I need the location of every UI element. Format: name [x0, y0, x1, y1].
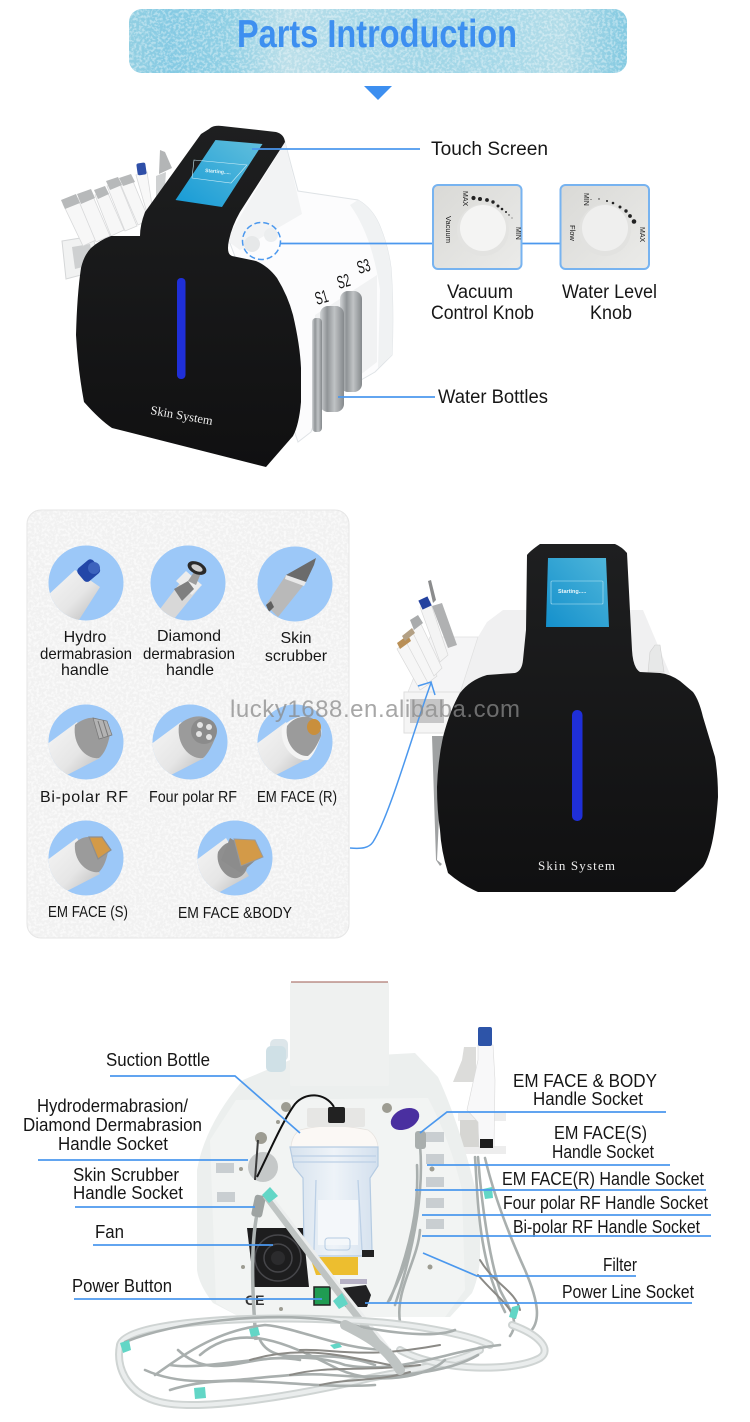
power socket	[342, 1285, 371, 1307]
panel: water level knob: MAX	[638, 227, 645, 242]
panel: handles	[27, 510, 349, 938]
CE mark: CE	[245, 1292, 264, 1308]
handle: four polar RF	[150, 704, 228, 782]
callout: filter	[423, 1253, 637, 1276]
screen: Starting.....	[558, 589, 587, 595]
label: skin scrubber: Skin	[280, 630, 312, 647]
callout: bi-polar socket: Bi-polar RF Handle Socket	[513, 1217, 700, 1237]
callout: dermabrasion handle socket: Handle Socket	[58, 1134, 168, 1154]
callout: EM face S socket: Handle Socket	[552, 1142, 654, 1162]
panel: water level knob: Flow	[568, 225, 577, 241]
black front panel	[76, 126, 301, 467]
handle: diamond dermabrasion	[150, 546, 226, 620]
panel: vacuum knob: Vacuum	[444, 216, 453, 243]
callout: suction bottle	[106, 1050, 300, 1133]
callout: touch screen: Touch Screen	[431, 139, 548, 160]
arrow: down triangle	[364, 86, 392, 100]
handle: hydro dermabrasion	[46, 546, 124, 623]
bolts	[239, 1102, 434, 1311]
bottle labels: S1	[313, 286, 331, 309]
label: diamond dermabrasion: handle	[166, 662, 214, 679]
callout: EM face R socket: EM FACE(R) Handle Socket	[502, 1169, 704, 1189]
brand: Skin System	[538, 858, 615, 873]
suction bottle	[257, 1095, 378, 1257]
callout: EM face S socket	[427, 1123, 670, 1165]
callout: dermabrasion handle socket: Diamond Dermabrasion	[23, 1115, 202, 1135]
title: Parts Introduction	[237, 13, 517, 56]
label: vacuum control knob: Control Knob	[431, 303, 534, 324]
hose coil	[119, 1317, 545, 1405]
callout: skin scrubber socket: Skin Scrubber	[73, 1165, 179, 1185]
white rear body	[460, 610, 670, 693]
label: diamond dermabrasion: dermabrasion	[143, 646, 235, 663]
knobs	[244, 228, 278, 252]
warning label	[310, 1257, 358, 1275]
label: EM face and body: EM FACE &BODY	[178, 905, 292, 922]
handles on rack	[397, 580, 457, 690]
label: skin scrubber	[265, 630, 328, 665]
label: diamond dermabrasion	[143, 628, 235, 679]
panel: water level knob: MIN	[582, 193, 589, 206]
bottle labels: S3	[355, 255, 373, 278]
panel: vacuum knob: MAX	[461, 191, 468, 206]
power switch	[314, 1287, 330, 1305]
label: vacuum control knob: Vacuum	[447, 282, 513, 303]
label: hydro dermabrasion: Hydro	[64, 629, 106, 646]
handle: bi-polar RF	[46, 704, 124, 782]
callout: suction bottle: Suction Bottle	[106, 1050, 210, 1070]
callout: four polar socket: Four polar RF Handle Socket	[503, 1193, 708, 1213]
machine: front three-quarter view	[61, 126, 393, 467]
label: water level knob: Water Level	[562, 282, 657, 303]
right knobs	[648, 645, 664, 672]
water bottles	[312, 275, 377, 432]
callout: fan: Fan	[95, 1222, 124, 1242]
tower	[290, 982, 389, 1086]
bottle labels: S2	[335, 270, 353, 293]
arrow: handles to rack	[350, 682, 435, 848]
label: water level knob	[562, 282, 657, 324]
callout: skin scrubber socket	[73, 1165, 255, 1207]
rear handles	[453, 1027, 506, 1154]
handle: EM face S	[46, 820, 124, 898]
touch screen	[176, 140, 262, 207]
callout: EM face and body socket: Handle Socket	[533, 1089, 643, 1109]
right cables	[388, 1131, 537, 1336]
label: diamond dermabrasion: Diamond	[157, 628, 221, 645]
callout: power button: Power Button	[72, 1276, 172, 1296]
callout: skin scrubber socket: Handle Socket	[73, 1183, 183, 1203]
label: hydro dermabrasion: handle	[61, 662, 109, 679]
label: EM face S: EM FACE (S)	[48, 904, 128, 921]
label: water level knob: Knob	[590, 303, 632, 324]
label: bi-polar RF: Bi-polar RF	[40, 789, 128, 806]
callout: dermabrasion handle socket	[23, 1096, 248, 1160]
callout: EM face and body socket: EM FACE & BODY	[513, 1071, 657, 1091]
label: skin scrubber: scrubber	[265, 648, 328, 665]
white body	[197, 1053, 480, 1317]
handle: EM face R	[255, 704, 332, 782]
blue light bar	[572, 710, 582, 821]
label: vacuum control knob	[431, 282, 534, 324]
panel: vacuum knob: MIN	[514, 227, 521, 240]
bottle labels	[313, 255, 373, 309]
white body	[225, 142, 393, 442]
small plates	[216, 1132, 444, 1229]
callout: power line socket: Power Line Socket	[562, 1282, 694, 1302]
screen	[546, 558, 609, 627]
callout: EM face S socket: EM FACE(S)	[554, 1123, 647, 1143]
label: four polar RF: Four polar RF	[149, 789, 237, 806]
callout: filter: Filter	[603, 1255, 637, 1275]
socket plate	[248, 1152, 278, 1182]
watermark: lucky1688.en.alibaba.com	[230, 696, 520, 723]
callout: water bottles: Water Bottles	[438, 387, 548, 408]
callout: dermabrasion handle socket: Hydrodermabrasion/	[37, 1096, 188, 1116]
label: hydro dermabrasion	[40, 629, 132, 679]
machine: front view	[397, 544, 718, 892]
brand: Skin System	[149, 403, 214, 428]
panel: water level knob	[560, 185, 649, 269]
machine: rear view	[119, 982, 545, 1405]
black panel	[437, 544, 718, 892]
callout: EM face and body socket	[420, 1071, 666, 1133]
handle: EM face and body	[195, 820, 272, 898]
handles in tray	[61, 150, 172, 279]
fan	[247, 1228, 309, 1287]
title banner	[129, 9, 627, 73]
label: hydro dermabrasion: dermabrasion	[40, 646, 132, 663]
sticker	[387, 1104, 423, 1134]
wires	[251, 1140, 390, 1350]
label: EM face R: EM FACE (R)	[257, 789, 337, 806]
callout: knobs line	[242, 222, 560, 260]
top knobs	[266, 1039, 288, 1072]
panel: vacuum knob	[433, 185, 522, 269]
touch screen: Starting.....	[205, 168, 232, 176]
blue light bar	[177, 278, 186, 379]
handle: skin scrubber	[258, 546, 332, 622]
